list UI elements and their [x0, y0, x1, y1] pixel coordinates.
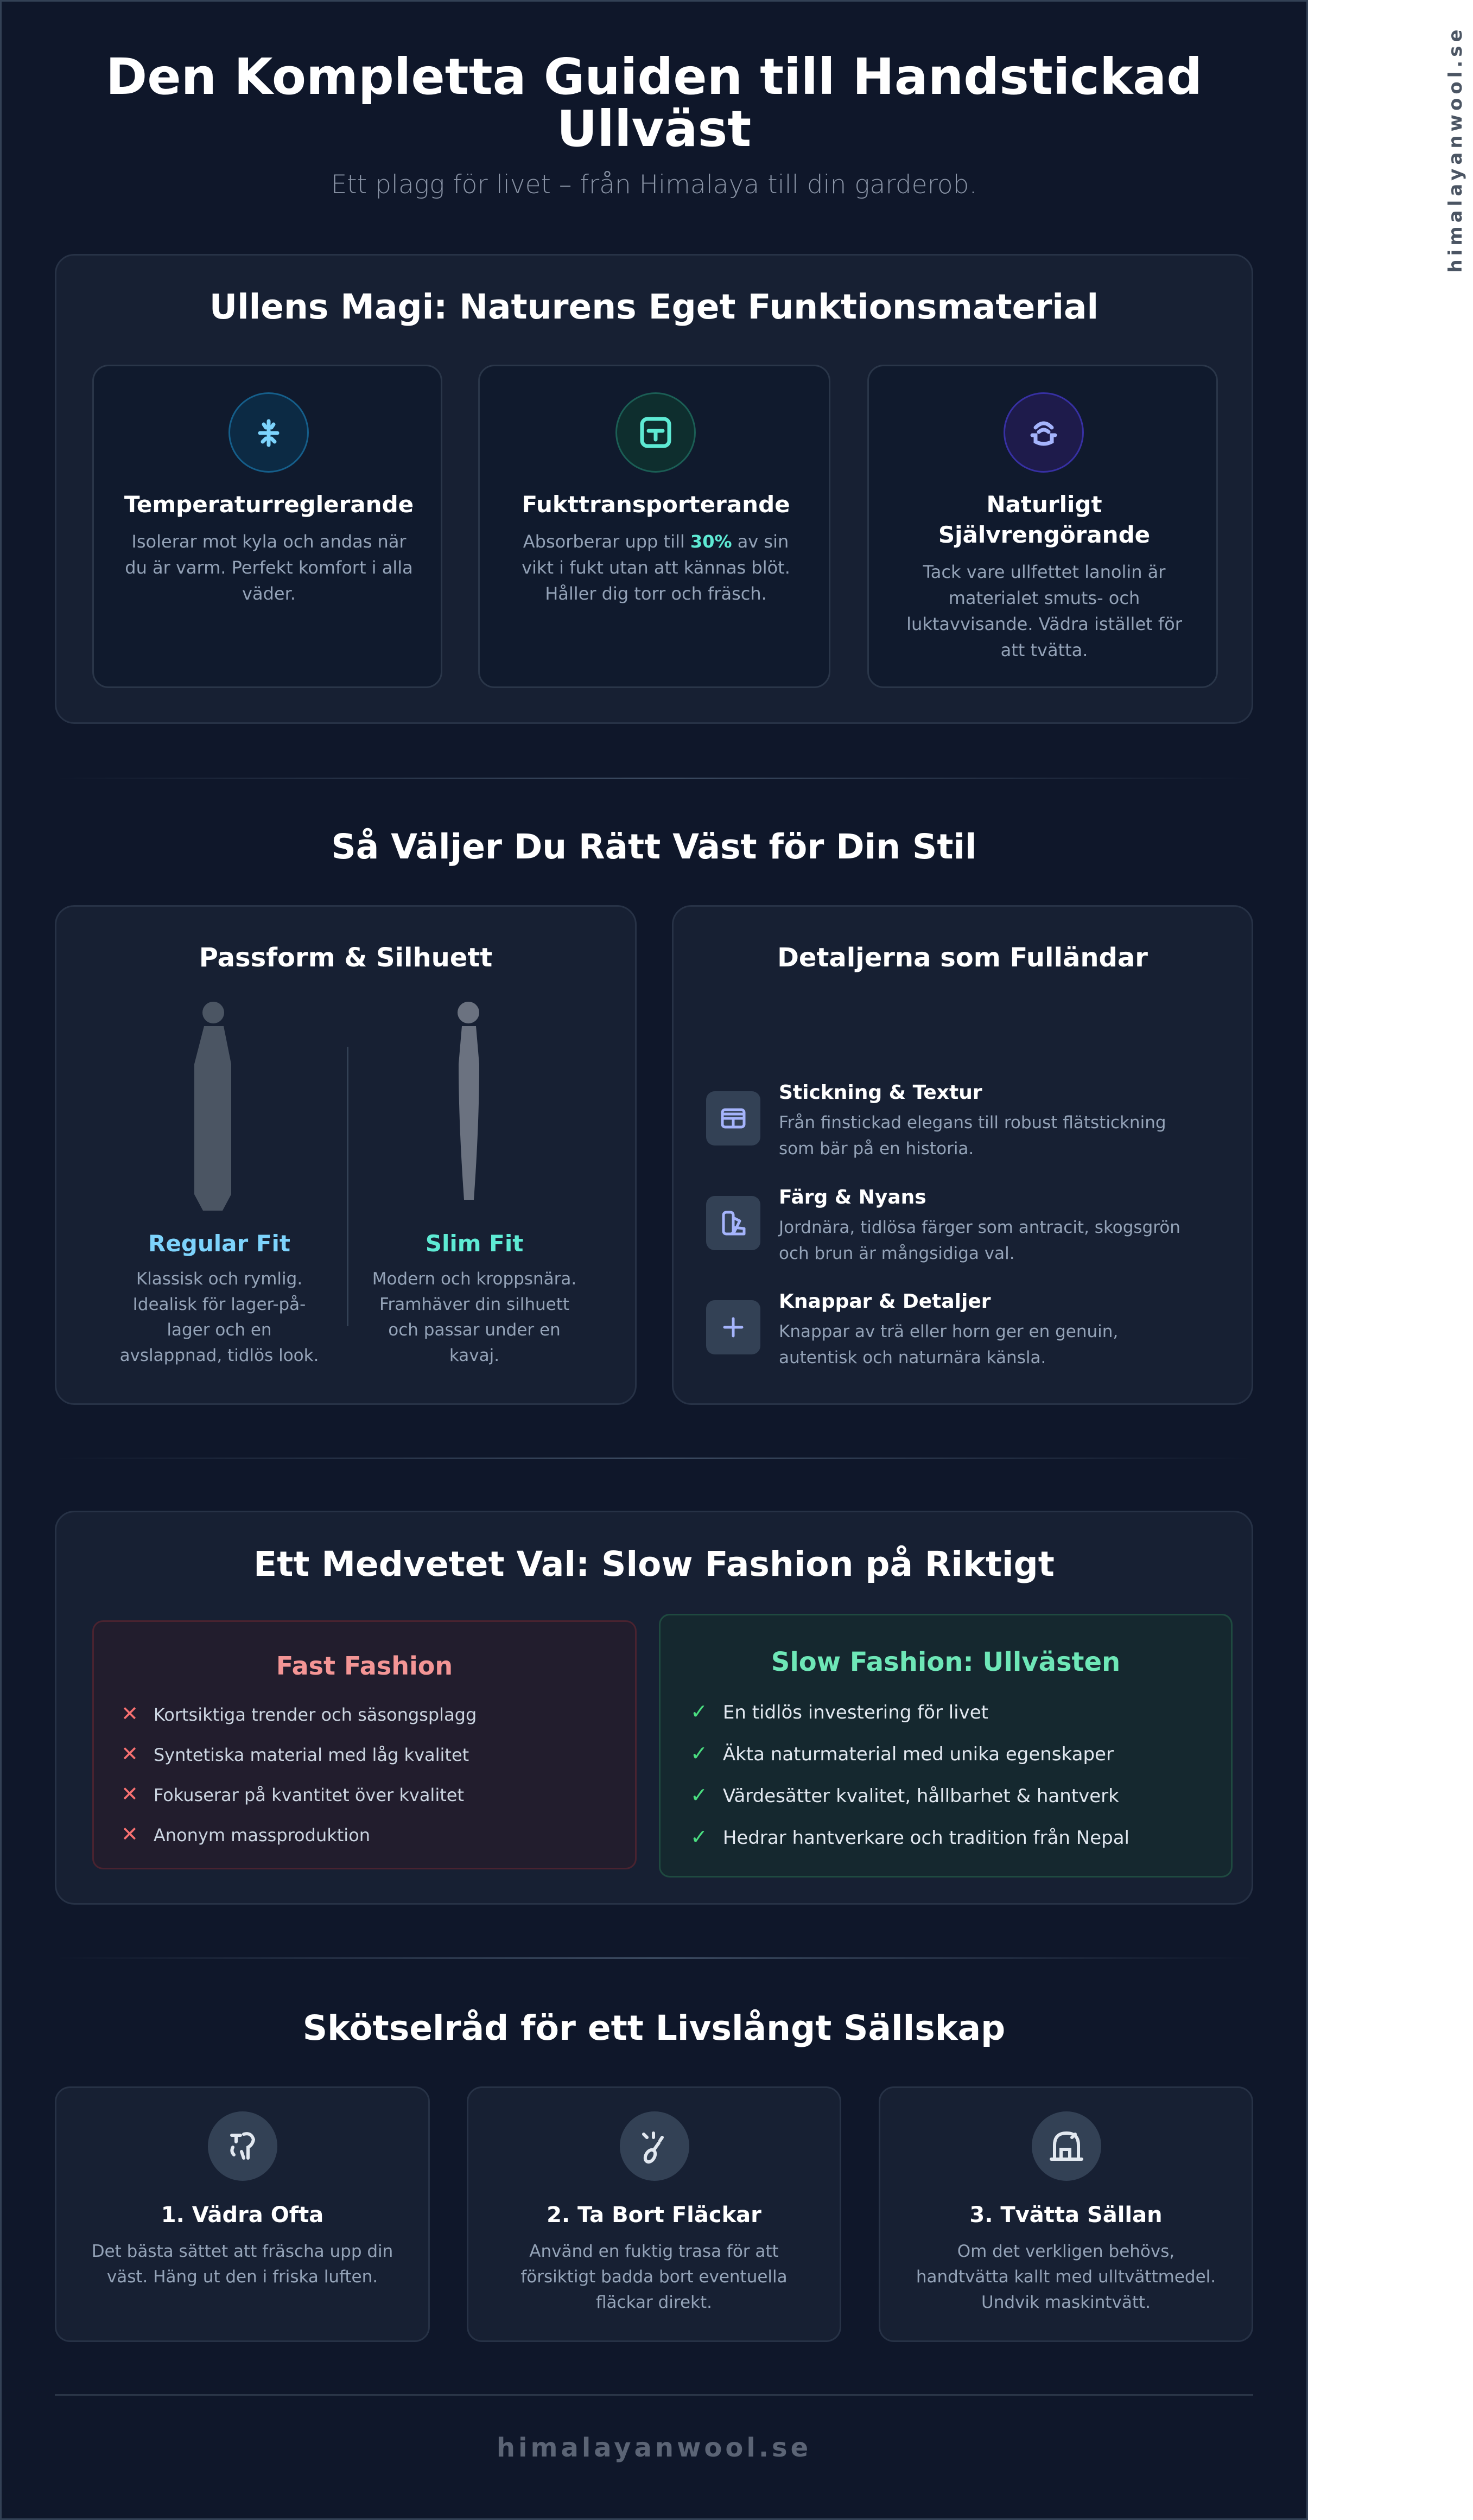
- text: regular fit: [120, 1269, 319, 1365]
- box: slow fashion: [659, 1614, 1233, 1878]
- card body: luktavvisande. Vädra istället för: [906, 614, 1182, 634]
- text: slim fit: kavaj.: [449, 1346, 499, 1365]
- text: slim fit: Modern och kroppsnära.: [372, 1269, 576, 1289]
- heading: details: Detaljerna som Fulländar: [777, 943, 1148, 973]
- title: [106, 48, 1202, 158]
- card title: 1. Vädra Ofta: [161, 2203, 323, 2228]
- card: moisture: [478, 365, 830, 688]
- card: stains: [467, 2086, 841, 2342]
- text: slim fit: Framhäver din silhuett: [379, 1295, 569, 1314]
- icon: self-cleaning: [1004, 392, 1084, 473]
- card body: fläckar direkt.: [596, 2293, 712, 2312]
- text: slim fit: [372, 1269, 576, 1365]
- item title: Stickning & Textur: [779, 1081, 982, 1104]
- card: air: [55, 2086, 430, 2342]
- panel: fit & silhouette: [55, 905, 637, 1405]
- list: slow fashion: ✓ En tidlös investering för livet: [690, 1700, 988, 1723]
- card body: väder.: [242, 583, 296, 604]
- title: Ullväst: [557, 100, 751, 158]
- item text: Jordnära, tidlösa färger som antracit, skogsgrön: [779, 1218, 1180, 1237]
- item title: Färg & Nyans: [779, 1186, 926, 1208]
- text: regular fit: Idealisk för lager-på-: [133, 1295, 306, 1314]
- card body: [62, 2239, 423, 2290]
- figure: slim fit: [458, 1002, 479, 1200]
- panel: slow fashion: [55, 1511, 1253, 1905]
- heading: fit: Passform & Silhuett: [199, 943, 492, 973]
- label: regular fit: Regular Fit: [148, 1230, 290, 1257]
- item: color: [706, 1186, 1180, 1263]
- card: temperature: [92, 365, 442, 688]
- title: slow fashion: Slow Fashion: Ullvästen: [771, 1647, 1120, 1677]
- list: fast fashion: ✕ Anonym massproduktion: [121, 1822, 370, 1846]
- text: regular fit: lager och en: [167, 1320, 272, 1340]
- list: slow fashion: ✓ Värdesätter kvalitet, hållbarhet & hantverk: [690, 1783, 1119, 1807]
- text: slim fit: och passar under en: [388, 1320, 561, 1340]
- card body: du är varm. Perfekt komfort i alla: [125, 557, 413, 578]
- card title: [938, 491, 1150, 548]
- item text: Knappar av trä eller horn ger en genuin,: [779, 1322, 1118, 1341]
- card title: Fukttransporterande: [522, 491, 790, 518]
- card body: [125, 531, 413, 604]
- card title: 2. Ta Bort Fläckar: [547, 2203, 761, 2228]
- card: self-cleaning: [867, 365, 1218, 688]
- card body: Använd en fuktig trasa för att: [529, 2242, 779, 2261]
- list: slow fashion: [690, 1700, 1129, 1849]
- card body: materialet smuts- och: [949, 588, 1140, 608]
- item text: Från finstickad elegans till robust flätstickning: [779, 1113, 1166, 1132]
- icon: knitting: [706, 1091, 760, 1146]
- icon: air: [208, 2111, 277, 2181]
- card body: [522, 531, 790, 604]
- card title: 3. Tvätta Sällan: [969, 2203, 1163, 2228]
- card: wash: [879, 2086, 1253, 2342]
- card body: Undvik maskintvätt.: [981, 2293, 1151, 2312]
- card body: att tvätta.: [1001, 640, 1088, 660]
- item: knitting: [706, 1081, 1166, 1159]
- icon: stains: [620, 2111, 689, 2181]
- box: fast fashion: [92, 1620, 637, 1869]
- card body: Absorberar upp till 30% av sin: [523, 531, 789, 552]
- item text: autentisk och naturnära känsla.: [779, 1348, 1046, 1367]
- icon: buttons: [706, 1300, 760, 1354]
- list: fast fashion: ✕ Kortsiktiga trender och säsongsplagg: [121, 1702, 477, 1726]
- card title: Självrengörande: [938, 521, 1150, 548]
- icon: color: [706, 1196, 760, 1250]
- subtitle: Ett plagg för livet – från Himalaya till din garderob.: [331, 170, 977, 200]
- item title: Knappar & Detaljer: [779, 1290, 991, 1313]
- panel: wool magic: [55, 254, 1253, 724]
- card body: Håller dig torr och fräsch.: [545, 583, 767, 604]
- list: slow fashion: ✓ Hedrar hantverkare och tradition från Nepal: [690, 1825, 1129, 1849]
- card body: Om det verkligen behövs,: [957, 2242, 1174, 2261]
- icon: wash: [1032, 2111, 1101, 2181]
- heading: care: Skötselråd för ett Livslångt Sällskap: [303, 2008, 1005, 2048]
- item text: som bär på en historia.: [779, 1139, 974, 1159]
- text: regular fit: avslappnad, tidlös look.: [120, 1346, 319, 1365]
- card body: försiktigt badda bort eventuella: [520, 2267, 788, 2287]
- item text: [778, 1218, 1180, 1263]
- icon: moisture: [615, 392, 696, 473]
- card body: [906, 562, 1182, 660]
- heading: slow fashion: Ett Medvetet Val: Slow Fashion på Riktigt: [253, 1544, 1055, 1584]
- card body: [886, 2239, 1246, 2315]
- card title: Temperaturreglerande: [124, 491, 414, 518]
- card title: Naturligt: [986, 491, 1102, 518]
- card body: [474, 2239, 834, 2315]
- item: buttons: [706, 1290, 1118, 1367]
- list: fast fashion: [121, 1702, 477, 1846]
- list: fast fashion: ✕ Fokuserar på kvantitet över kvalitet: [121, 1782, 464, 1806]
- card body: Det bästa sättet att fräscha upp din: [92, 2242, 393, 2261]
- list: fast fashion: ✕ Syntetiska material med låg kvalitet: [121, 1742, 469, 1766]
- title: fast fashion: Fast Fashion: [276, 1651, 453, 1681]
- text: regular fit: Klassisk och rymlig.: [136, 1269, 302, 1289]
- side brand vertical text: himalayanwool.se: [1445, 26, 1466, 273]
- list: slow fashion: ✓ Äkta naturmaterial med unika egenskaper: [690, 1741, 1114, 1765]
- card body: Tack vare ullfettet lanolin är: [923, 562, 1165, 582]
- panel: details: [672, 905, 1253, 1405]
- item text: [779, 1113, 1166, 1159]
- heading: wool magic: Ullens Magi: Naturens Eget Funktionsmaterial: [209, 287, 1099, 327]
- title: Den Kompletta Guiden till Handstickad: [106, 48, 1202, 106]
- icon: temperature: [228, 392, 309, 473]
- label: slim fit: Slim Fit: [426, 1230, 523, 1257]
- heading: choose vest: Så Väljer Du Rätt Väst för Din Stil: [331, 827, 977, 867]
- card body: vikt i fukt utan att kännas blöt.: [522, 557, 790, 578]
- card body: Isolerar mot kyla och andas när: [131, 531, 407, 552]
- item text: [779, 1322, 1118, 1367]
- item text: och brun är mångsidiga val.: [779, 1244, 1015, 1263]
- figure: regular fit: [194, 1002, 231, 1211]
- card body: väst. Häng ut den i friska luften.: [107, 2267, 378, 2287]
- card body: handtvätta kallt med ulltvättmedel.: [916, 2267, 1216, 2287]
- footer brand: himalayanwool.se: [497, 2433, 811, 2463]
